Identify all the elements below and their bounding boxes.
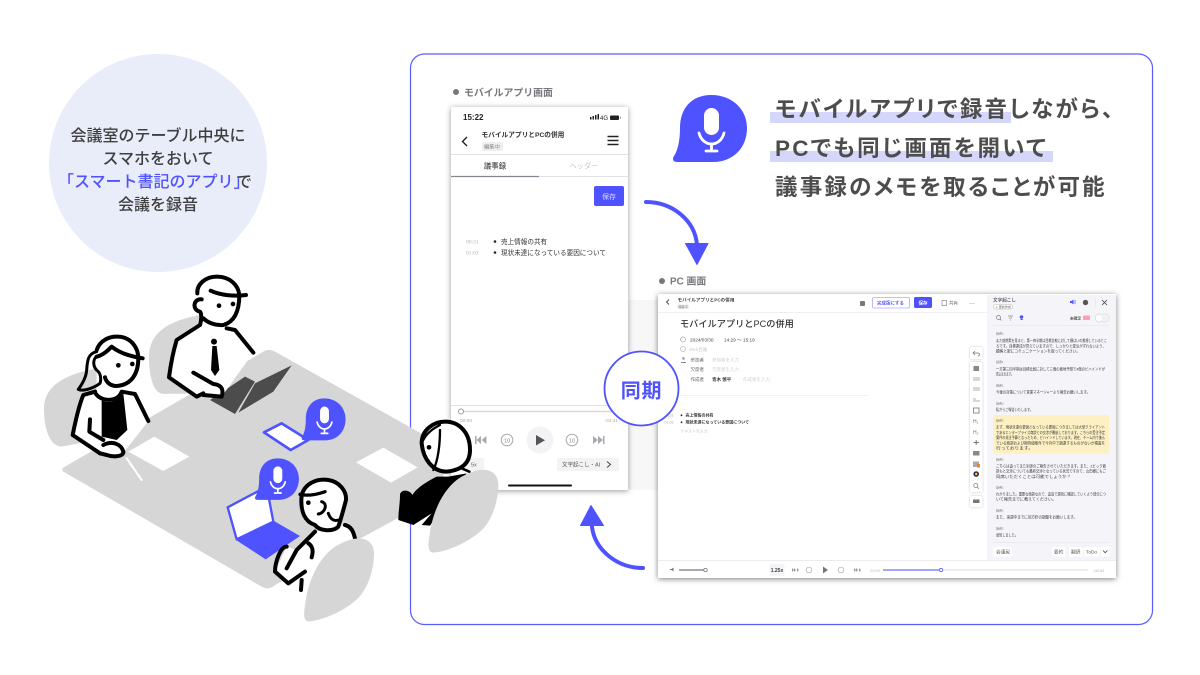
mobile notes list: 売上情報の共有 [501,237,548,246]
mobile status bar [463,113,621,122]
icon: mic bubble over laptop [255,458,299,500]
panel: transcript sidebar: ＋ 要約作成 [995,304,1011,309]
transcript text: 同席いただくことは可能でしょうか？ [996,474,1071,479]
PC note metadata: 参加者 [690,356,704,364]
transcript text: いて報告までに教えてください。 [996,496,1056,502]
PC header bar: 編集中 [678,304,688,309]
editor toolbar [970,347,982,507]
transcript text: 話者1 [996,484,1004,490]
mobile notes list [466,237,606,257]
highlighted transcript block [993,415,1109,454]
transcript text: ろです。目標達成が見えていますので、しっかりと受注がずれないよう、 [996,344,1106,348]
panel: mobile app screen [451,107,628,490]
PC header bar [658,296,987,312]
blue laptop [228,487,300,559]
mobile audio player: 00:00 [460,418,472,424]
mobile notes list: 00:31 [466,240,479,246]
transcript text: 話者2 [996,400,1004,406]
shaded gap between the two screens [628,300,658,490]
transcript text: でいる商談および期待値案件で今月中で調達するものがないか精査を [996,440,1105,446]
mobile status bar: 15:22 [463,113,484,122]
panel: intro circle callout: で [236,174,252,191]
panel: transcript sidebar: 未確定 [1070,316,1081,320]
paper: left [128,437,189,471]
transcript text: 話者2 [996,526,1004,530]
panel: intro circle callout: 会議室のテーブル中央に [70,126,246,145]
save button [594,186,624,206]
heading: main message: 議事録のメモを取ることが可能 [775,174,1107,200]
heading: main message [770,96,1115,200]
PC notes list: 00:31 [664,414,674,418]
transcript text: 話者1 [996,508,1004,512]
PC note metadata: 作成者を入力 [743,376,770,383]
pen [127,458,142,480]
person: woman [73,337,148,456]
mobile audio player [451,406,628,486]
PC notes list: 売上情報の共有 [686,412,714,418]
transcript action buttons: ToDo [1086,550,1097,554]
mobile status bar: 4G [600,116,608,122]
PC audio player: -02:41 [1093,568,1105,573]
icon: large microphone speech bubble [673,95,747,162]
panel: transcript sidebar: 文字起こし [993,297,1016,304]
transcript text: わかりました。重要な商談なので、追加で週別に確認していくよう部分につ [996,492,1106,496]
badge: sync circle [604,352,678,426]
chair: back left [149,315,200,394]
heading: main message: PCでも同じ画面を開いて [775,136,1048,161]
PC note metadata: Web会議 [689,346,708,353]
person: man with tie [169,277,253,397]
mobile tabs [451,162,628,176]
transcript text: 話者1 [996,382,1004,388]
illustration: meeting room [44,277,498,621]
PC header bar: 完成版にする [877,300,904,306]
mobile audio player: 5x [471,462,477,468]
mobile app header [451,130,628,154]
PC notes list: テキストを入力 [680,428,708,434]
mobile app header: 編集中 [484,142,500,150]
save button: 保存 [602,192,616,201]
mobile audio player: -03:41 [604,418,618,424]
PC notes list: 01:03 [664,420,674,424]
PC note metadata: 2024/03/30 [690,338,714,343]
PC notes list [664,412,749,434]
transcript text: 行っております。 [996,446,1033,450]
panel: outlined frame [410,54,1152,624]
mobile app header: モバイルアプリとPCの併用 [482,130,565,139]
transcript text [996,330,1107,538]
transcript text: 話者1 [996,330,1004,336]
editor toolbar: H₁ [973,419,979,425]
mobile notes list: 現状未達になっている要因について [501,248,606,257]
PC note metadata: 作成者 [690,376,704,383]
panel: intro circle callout: 「スマート書記のアプリ」 [58,173,250,191]
transcript text: また、来週中までに別方針の調整をお願いします。 [996,514,1077,520]
chair: front [304,538,374,621]
mobile notes list: 01:03 [466,250,479,256]
PC note metadata: 欠席者を入力 [712,366,739,373]
table [62,350,443,588]
transcript text: こちらは追ってまた別途のご報告させていただきます。また、Zビック商 [996,464,1106,468]
PC audio player: 1.25x [771,568,783,574]
heading: main message: モバイルアプリで録音しながら、 [775,96,1115,122]
arrow: PC to mobile [580,506,643,568]
paper: right [356,448,418,483]
transcript text: また前期実を見ると、第一四半期は目標比較に対して横ばいの推移しているとこ [996,338,1107,343]
mobile audio player: 10 [504,438,510,444]
PC header bar: 保存 [918,300,928,306]
mobile tabs: ヘッダー [570,162,598,170]
panel: transcript sidebar [987,295,1116,560]
transcript action buttons [994,547,1110,556]
transcript action buttons: 翻訳 [1071,548,1081,556]
heading: PC screen label: PC 画面 [670,276,706,288]
transcript text: 顧客と密にコミュニケーションを取ってください。 [996,348,1080,354]
transcript text: 見込まれます。 [996,372,1014,376]
transcript text: 談もと交渉についても最終交渉となっている状況ですので、山田様にもご [996,468,1106,474]
transcript text: 話者2 [996,418,1004,422]
PC header bar: … [969,300,975,306]
PC note metadata: 青木 慎平 [712,376,732,383]
PC note metadata: 14:29 〜 15:19 [724,338,755,343]
transcript text: 話者2 [996,456,1004,462]
panel: intro circle callout [49,54,267,272]
PC notes list: 現状未達になっている要因について [686,419,749,425]
panel: intro circle callout: 会議を録音 [118,196,198,214]
PC note metadata: 参加者を入力 [712,356,739,364]
dark laptop [210,365,292,414]
panel: PC screen [658,294,1116,578]
chair: left [44,368,97,447]
transcript action buttons: 会議尻 [996,548,1010,556]
mobile audio player: 10 [569,438,575,444]
transcript text: 承知しました。 [996,532,1018,538]
PC audio player [658,560,1116,576]
panel: intro circle callout: スマホをおいて [102,150,214,168]
heading: mobile app screen label: モバイルアプリ画面 [464,87,553,99]
person: right side [398,422,470,526]
transcript text: 話者1 [996,359,1004,364]
smartphone on table [264,423,308,450]
mobile tabs: 議事録 [484,162,507,170]
transcript text: 案件の発注予算となったため、ビハインドしています。現在、チーム内で進ん [996,435,1105,440]
PC header bar: モバイルアプリとPCの併用 [678,296,735,304]
chair: right [429,470,498,553]
PC note metadata: モバイルアプリとPCの併用 [680,318,794,329]
transcript text: 一方第三四半期は目標比較に対して三億の着地予想で4億のビハインドが [996,366,1105,372]
editor toolbar: H₂ [973,430,979,436]
PC audio player: 00:00 [870,568,881,573]
badge: sync circle: 同期 [621,380,662,402]
PC note metadata [680,318,868,396]
person: front with laptop [275,480,355,590]
transcript text: まず、現状未達の要因となっている要因につきましては大型クライアント [996,424,1105,430]
transcript text: 私からご報告いたします。 [996,407,1033,412]
arrow: mobile to PC [646,202,708,264]
transcript text: 今後の対策について営業マネージャーより報告お願いします。 [996,390,1090,394]
PC note metadata: 欠席者 [690,366,704,373]
transcript action buttons: 要約 [1054,548,1064,556]
icon: mic bubble over smartphone [302,398,346,440]
transcript text: であるエンタープライズ商談との交渉が難航しております。こちらの受注予定 [996,430,1105,435]
mobile audio player: 文字起こし・AI [562,460,601,468]
PC header bar: 共有 [949,300,958,306]
